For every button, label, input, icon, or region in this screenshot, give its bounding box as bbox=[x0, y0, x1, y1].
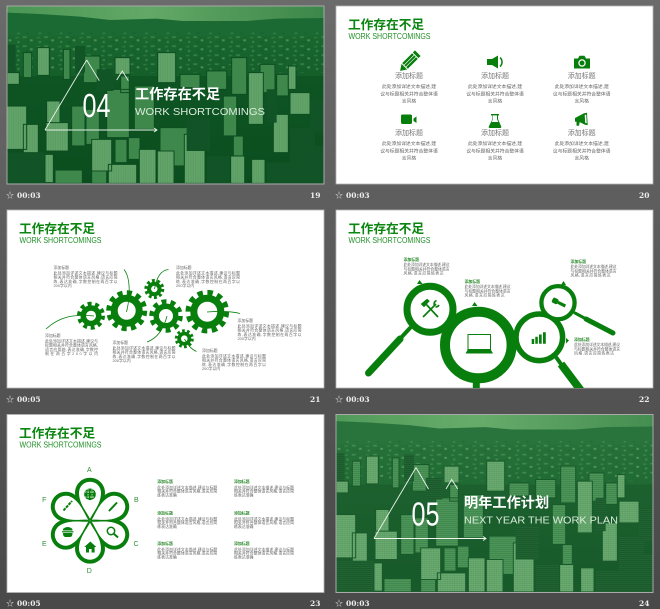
footer slide 19: ☆ bbox=[6, 191, 14, 200]
footer slide 20: 00:03 bbox=[346, 191, 370, 200]
item headings and descriptions: 添加标题 bbox=[481, 71, 509, 80]
gear callout text: 此处添加详述文本描述,建议与标题 bbox=[202, 354, 266, 358]
section number 05: 05 bbox=[412, 496, 440, 532]
petal letters: B bbox=[134, 497, 139, 504]
gear callout text: 此处添加详述文本描述,建议与标题 bbox=[54, 270, 118, 276]
footer slide 24 bbox=[335, 599, 649, 608]
icon: pen bbox=[109, 502, 117, 511]
flower legend text: 练表达准确 bbox=[157, 492, 177, 497]
icon: globe bbox=[84, 488, 96, 500]
slide 20: icon grid bbox=[336, 6, 653, 184]
gear callout text: 此处添加详述文本描述,建议与标题 bbox=[112, 346, 176, 350]
item headings and descriptions: 议与标题相关并符合整体语 bbox=[466, 147, 524, 154]
flower legend text: 练表达准确 bbox=[157, 554, 177, 559]
flower legend text: 此处添加详述文本描述,建议与标题 bbox=[157, 547, 217, 552]
item headings and descriptions: 言风格 bbox=[574, 154, 589, 161]
slide 22: magnifiers bbox=[336, 210, 653, 396]
gear cluster bbox=[79, 280, 227, 347]
flower legend text: 添加标题 bbox=[157, 541, 173, 546]
flower legend text: 练表达准确 bbox=[234, 492, 254, 497]
flower legend text: 此处添加详述文本描述,建议与标题 bbox=[234, 516, 294, 522]
flower legend text: 此处添加详述文本描述,建议与标题 bbox=[234, 547, 294, 552]
gear callout text: 语言应简练,表达准确,字数控 bbox=[45, 347, 98, 352]
magnifier callouts: 此处添加详述文本描述,建议 bbox=[570, 264, 617, 269]
flower petals bbox=[45, 478, 135, 564]
gear callout text: 200字以内 bbox=[176, 283, 194, 288]
footer slide 21: ☆ bbox=[6, 395, 14, 404]
gear callout text: 添加标题 bbox=[238, 318, 253, 323]
subtitle: WORK SHORTCOMINGS bbox=[20, 236, 102, 245]
flower legend text: 此处添加详述文本描述,建议与标题 bbox=[157, 485, 217, 490]
footer slide 19: 00:03 bbox=[17, 191, 41, 200]
gear callout text bbox=[45, 265, 302, 371]
footer slide 24: 00:03 bbox=[346, 599, 370, 608]
gear callout text: 相关并符合整体语言风格,语言应简 bbox=[176, 275, 240, 280]
gear callout text: 相关并符合整体语言风格,语言应简 bbox=[202, 358, 266, 363]
petal letters: D bbox=[87, 568, 92, 575]
magnifier callouts bbox=[404, 257, 620, 356]
flower legend text: 相关并符合整体语言风格,语言应简 bbox=[157, 520, 217, 525]
magnifier callouts: 风格,语言应简练表达 bbox=[404, 271, 444, 276]
gear callout text: 制在两百字200字以内 bbox=[45, 351, 98, 356]
flower legend text: 练表达准确 bbox=[157, 524, 177, 529]
gear callout text: 200字以内 bbox=[238, 336, 256, 341]
magnifier callouts: 与标题相关并符合整体语言 bbox=[464, 288, 511, 293]
magnifier callouts: 添加标题 bbox=[574, 337, 590, 342]
slide 23: flower diagram bbox=[7, 414, 324, 592]
item headings and descriptions: 此处添加详述文本描述,建 bbox=[382, 140, 436, 147]
magnifier callouts: 风格,语言应简练表达 bbox=[570, 273, 611, 278]
gear callout text: 200字以内 bbox=[112, 358, 131, 363]
petal letters: C bbox=[133, 541, 139, 548]
item headings and descriptions: 言风格 bbox=[488, 154, 502, 161]
magnifier callouts: 此处添加详述文本描述,建议 bbox=[464, 284, 511, 289]
flower legend text: 添加标题 bbox=[157, 479, 173, 484]
section subheading: NEXT YEAR THE WORK PLAN bbox=[464, 514, 618, 526]
slide 19: section cover 04 bbox=[7, 6, 324, 184]
flower legend text: 添加标题 bbox=[234, 510, 250, 516]
footer slide 19: 19 bbox=[310, 191, 320, 200]
item headings and descriptions: 议与标题相关并符合整体语 bbox=[380, 90, 438, 97]
gear callout text: 练,表达准确,字数控制在两百字以 bbox=[112, 354, 176, 359]
gear callout text: 练,表达准确,字数控制在两百字以 bbox=[54, 279, 118, 284]
section heading: 工作存在不足 bbox=[135, 86, 220, 103]
item headings and descriptions: 添加标题 bbox=[568, 128, 596, 137]
petal letters: F bbox=[42, 497, 46, 504]
item headings and descriptions: 言风格 bbox=[402, 154, 416, 161]
gear callout text: 200字以内 bbox=[202, 366, 220, 371]
title: 工作存在不足 bbox=[348, 221, 424, 236]
flower legend text: 练表达准确 bbox=[234, 524, 254, 529]
icon: flashlight bbox=[551, 297, 567, 309]
magnifier group bbox=[368, 280, 613, 396]
footer slide 22 bbox=[335, 395, 649, 404]
footer slide 22: 00:03 bbox=[346, 395, 370, 404]
section number 04: 04 bbox=[82, 87, 110, 124]
footer slide 20: ☆ bbox=[335, 191, 343, 200]
magnifier callouts: 添加标题 bbox=[464, 279, 480, 284]
flower legend text: 练表达准确 bbox=[234, 554, 254, 559]
title: 工作存在不足 bbox=[348, 17, 424, 32]
petal letters: A bbox=[87, 467, 92, 474]
footer slide 22: ☆ bbox=[335, 395, 343, 404]
petal letters: E bbox=[42, 541, 47, 548]
triangle outline bbox=[45, 60, 157, 132]
triangle outline bbox=[374, 468, 486, 540]
flower legend text: 相关并符合整体语言风格,语言应简 bbox=[234, 489, 294, 494]
footer slide 21: 21 bbox=[310, 395, 320, 404]
magnifier callouts: 与标题相关并符合整体语言 bbox=[570, 268, 617, 273]
item headings and descriptions: 言风格 bbox=[488, 97, 502, 104]
flower legend text: 此处添加详述文本描述,建议与标题 bbox=[234, 485, 294, 490]
flower legend text: 添加标题 bbox=[234, 541, 250, 546]
gear callout text: 相关并符合整体语言风格,语言应简 bbox=[54, 275, 118, 280]
icon: pencil bbox=[397, 50, 421, 74]
item headings and descriptions: 议与标题相关并符合整体语 bbox=[380, 147, 438, 154]
flower legend text: 相关并符合整体语言风格,语言应简 bbox=[157, 489, 217, 494]
flower legend text: 此处添加详述文本描述,建议与标题 bbox=[157, 516, 217, 522]
flower legend text: 添加标题 bbox=[234, 479, 250, 484]
gear callout text: 添加标题 bbox=[176, 265, 192, 270]
magnifier callouts: 添加标题 bbox=[404, 257, 419, 262]
item headings and descriptions: 添加标题 bbox=[395, 71, 423, 80]
flower legend text bbox=[157, 479, 294, 559]
gear callout text: 添加标题 bbox=[202, 348, 218, 353]
footer slide 24: 24 bbox=[639, 599, 649, 608]
icon: megaphone bbox=[575, 113, 588, 126]
flower legend text: 添加标题 bbox=[157, 510, 173, 516]
slide 24: section cover 05 bbox=[336, 414, 653, 592]
icon: wrench tool bbox=[64, 501, 72, 510]
subtitle: WORK SHORTCOMINGS bbox=[348, 236, 430, 245]
gear callout text: 练,表达准确,字数控制在两百字以 bbox=[176, 279, 240, 284]
gear callout text: 相关并符合整体语言风格,语言应简 bbox=[112, 350, 176, 355]
gear callout text: 200字以内 bbox=[54, 283, 72, 288]
magnifier callouts: 风格,语言应简练表达 bbox=[464, 293, 505, 298]
magnifier callouts: 此处添加详述文本描述,建议 bbox=[404, 262, 450, 267]
petal letters bbox=[42, 467, 139, 575]
title: 工作存在不足 bbox=[19, 426, 95, 440]
icon: house bbox=[84, 542, 96, 552]
slide 21: gears bbox=[7, 210, 324, 388]
item headings and descriptions: 此处添加详述文本描述,建 bbox=[555, 140, 609, 147]
footer slide 19 bbox=[6, 191, 320, 200]
gear callout text: 添加标题 bbox=[45, 333, 61, 338]
icon: tools bbox=[421, 299, 439, 317]
icon: laptop bbox=[466, 334, 493, 354]
magnifier callouts: 与标题相关并符合整体语言 bbox=[404, 266, 450, 271]
gear callout text: 练,表达准确,字数控制在两百字以 bbox=[238, 332, 302, 337]
icon: camera bbox=[574, 56, 590, 68]
item headings and descriptions: 言风格 bbox=[574, 97, 589, 104]
connector curves bbox=[46, 270, 240, 352]
flower legend text: 相关并符合整体语言风格,语言应简 bbox=[234, 551, 294, 556]
item headings and descriptions: 议与标题相关并符合整体语 bbox=[553, 147, 611, 154]
icon: signal bars bbox=[532, 332, 546, 344]
item headings and descriptions bbox=[380, 71, 611, 161]
subtitle: WORK SHORTCOMINGS bbox=[20, 440, 102, 450]
icon: speaker bbox=[487, 56, 502, 68]
section subheading: WORK SHORTCOMINGS bbox=[135, 106, 265, 118]
item headings and descriptions: 添加标题 bbox=[395, 128, 423, 137]
footer slide 20 bbox=[335, 191, 649, 200]
footer slide 23: 00:05 bbox=[17, 599, 41, 608]
item headings and descriptions: 此处添加详述文本描述,建 bbox=[468, 140, 522, 147]
gear callout text: 添加标题 bbox=[112, 340, 128, 345]
item headings and descriptions: 言风格 bbox=[402, 97, 416, 104]
magnifier callouts: 添加标题 bbox=[570, 259, 586, 264]
footer slide 23: 23 bbox=[310, 599, 320, 608]
magnifier callouts: 与标题相关并符合整体语言 bbox=[574, 346, 620, 351]
icon: flask bbox=[489, 114, 501, 128]
item headings and descriptions: 此处添加详述文本描述,建 bbox=[468, 83, 522, 90]
footer slide 21 bbox=[6, 395, 320, 404]
gear callout text: 此处添加详述文本描述,建议与标题 bbox=[176, 270, 240, 276]
footer slide 24: ☆ bbox=[335, 599, 343, 608]
flower legend text: 相关并符合整体语言风格,语言应简 bbox=[234, 520, 294, 525]
item headings and descriptions: 此处添加详述文本描述,建 bbox=[555, 83, 609, 90]
gear callout text: 相关并符合整体语言风格,语言应简 bbox=[238, 328, 302, 333]
magnifier callouts: 风格,语言应简练表达 bbox=[574, 351, 614, 356]
footer slide 23: ☆ bbox=[6, 599, 14, 608]
gear callout text: 标题相关并符合整体语言风格, bbox=[45, 343, 98, 348]
footer slide 23 bbox=[6, 599, 320, 608]
icon: search bbox=[107, 527, 118, 538]
title: 工作存在不足 bbox=[19, 221, 95, 236]
footer slide 20: 20 bbox=[639, 191, 649, 200]
gear callout text: 此处添加详述文本描述,建议与标题 bbox=[238, 324, 302, 328]
item headings and descriptions: 议与标题相关并符合整体语 bbox=[553, 90, 611, 97]
icon: video camera bbox=[401, 114, 416, 124]
magnifier callouts: 此处添加详述文本描述,建议 bbox=[574, 342, 620, 347]
item headings and descriptions: 议与标题相关并符合整体语 bbox=[466, 90, 524, 97]
item headings and descriptions: 添加标题 bbox=[481, 128, 509, 137]
gear callout text: 此处添加详述文本描述,建议与 bbox=[45, 338, 98, 344]
gear callout text: 添加标题 bbox=[54, 265, 69, 270]
section heading: 明年工作计划 bbox=[464, 494, 549, 512]
footer slide 22: 22 bbox=[639, 395, 649, 404]
subtitle: WORK SHORTCOMINGS bbox=[348, 32, 430, 41]
flower legend text: 相关并符合整体语言风格,语言应简 bbox=[157, 551, 217, 556]
gear callout text: 练,表达准确,字数控制在两百字以 bbox=[202, 362, 266, 367]
item headings and descriptions: 添加标题 bbox=[568, 71, 596, 80]
item headings and descriptions: 此处添加详述文本描述,建 bbox=[382, 83, 436, 90]
footer slide 21: 00:05 bbox=[17, 395, 41, 404]
icon: bowl bbox=[62, 527, 74, 537]
